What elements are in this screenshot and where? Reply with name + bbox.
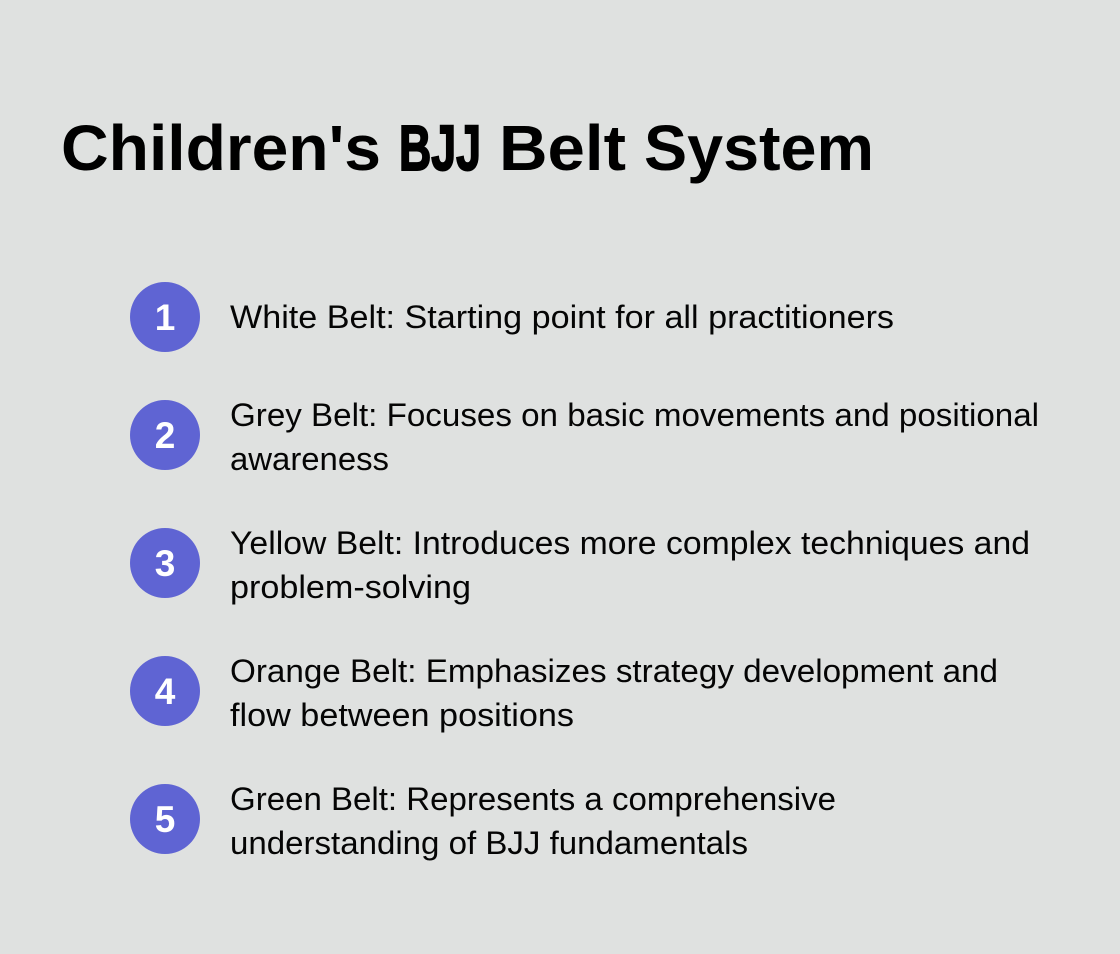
number badge 4 [130, 656, 200, 726]
title: BJJ [399, 112, 481, 184]
list item 5: Green Belt [130, 781, 836, 861]
item 5 text: understanding of BJJ fundamentals [230, 825, 748, 861]
title: Belt [499, 112, 626, 184]
list item 1: White Belt [130, 282, 894, 352]
number badge 2: 2 [155, 415, 175, 456]
item 5 text: Green Belt: Represents a comprehensive [230, 781, 836, 817]
item 3 text: Yellow Belt: Introduces more complex techniques and [230, 525, 1030, 561]
title: System [644, 112, 874, 184]
item 4 text [230, 653, 998, 733]
list item 4: Orange Belt [130, 653, 998, 733]
number badge 5 [130, 784, 200, 854]
item 2 text [230, 397, 1039, 477]
list item 3: Yellow Belt [130, 525, 1030, 605]
number badge 2 [130, 400, 200, 470]
number badge 3: 3 [155, 543, 175, 584]
number badge 3 [130, 528, 200, 598]
item 3 text [230, 525, 1030, 605]
list item 2: Grey Belt [130, 397, 1039, 477]
item 2 text: awareness [230, 441, 389, 477]
item 5 text [230, 781, 836, 861]
item 1 text: White Belt: Starting point for all practitioners [230, 299, 894, 335]
number badge 1 [130, 282, 200, 352]
item 2 text: Grey Belt: Focuses on basic movements and positional [230, 397, 1039, 433]
number badge 4: 4 [155, 671, 176, 712]
number badge 5: 5 [155, 799, 175, 840]
number badge 1: 1 [155, 297, 175, 338]
item 4 text: flow between positions [230, 697, 574, 733]
item 3 text: problem-solving [230, 569, 471, 605]
title: Children's [61, 112, 381, 184]
item 4 text: Orange Belt: Emphasizes strategy development and [230, 653, 998, 689]
